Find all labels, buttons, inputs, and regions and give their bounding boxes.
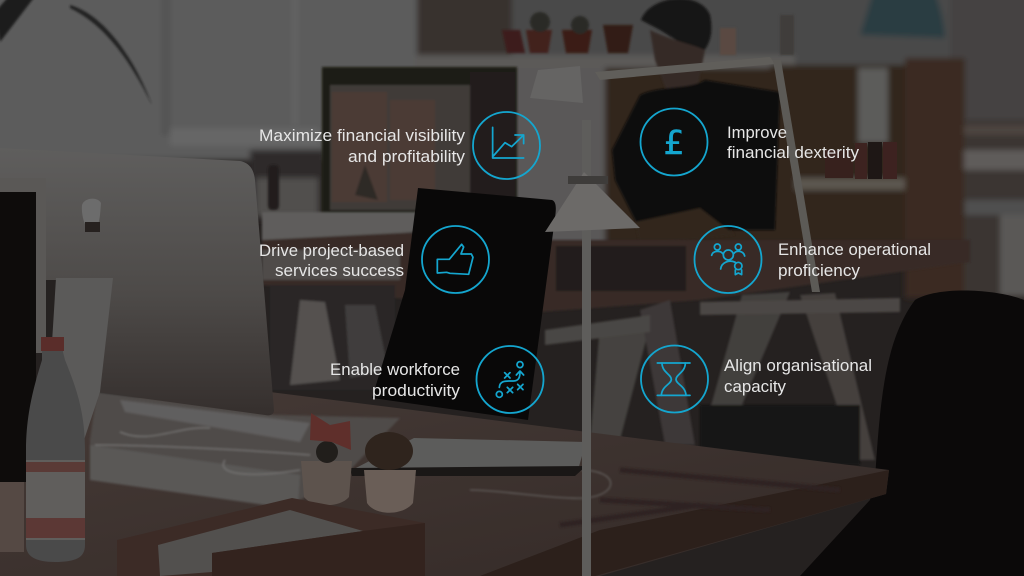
label: drive project-based services success: Drive project-based — [259, 241, 404, 260]
pencil cup — [0, 482, 24, 552]
label: maximize financial visibility — [259, 126, 466, 166]
label: drive project-based services success: services success — [275, 261, 404, 280]
bookshelf books — [825, 142, 897, 179]
label: align organisational capacity: Align organisational — [724, 356, 872, 375]
middle desk and trestles — [262, 212, 970, 465]
water bottle — [26, 337, 85, 562]
person at desk — [612, 0, 780, 245]
label: drive project-based services success — [259, 241, 404, 280]
cactus pots — [301, 432, 416, 513]
label: enable workforce productivity: productivity — [372, 381, 461, 400]
label: enhance operational proficiency — [778, 240, 931, 280]
red bow — [310, 413, 351, 450]
shelf objects — [502, 12, 794, 55]
icon: hourglass — [641, 346, 708, 412]
icon: strategy play — [476, 346, 544, 413]
label: enhance operational proficiency: Enhance operational — [778, 240, 931, 259]
label: improve financial dexterity: Improve — [727, 123, 787, 142]
item: enable workforce productivity — [330, 346, 544, 413]
label: enable workforce productivity: Enable workforce — [330, 360, 460, 379]
item: maximize financial visibility — [259, 112, 540, 179]
label: align organisational capacity — [724, 356, 872, 396]
label: enhance operational proficiency: proficiency — [778, 261, 860, 280]
item: drive project-based services — [259, 226, 489, 293]
wooden tray — [117, 498, 425, 576]
icon: pound sign — [640, 108, 708, 176]
label: enable workforce productivity — [330, 360, 461, 400]
label: maximize financial visibility: and profitability — [348, 147, 466, 166]
black office chair — [372, 188, 556, 420]
large foreground desk — [0, 392, 889, 576]
item: enhance operational proficiency — [694, 226, 931, 293]
icon: team with award — [694, 226, 762, 293]
label: improve financial dexterity: financial dexterity — [727, 143, 860, 162]
label: align organisational capacity: capacity — [724, 377, 786, 396]
light desk surface, keyboard and cable — [90, 392, 611, 505]
icon: pound sign: £ — [664, 123, 684, 162]
background plant leaf — [0, 0, 279, 210]
rear monitor — [322, 67, 517, 217]
label: maximize financial visibility: Maximize financial visibility — [259, 126, 466, 145]
icon: thumbs up — [422, 226, 489, 293]
desk lamp — [530, 57, 820, 576]
iMac back — [0, 148, 274, 440]
item: align organisational capacity — [641, 346, 872, 412]
icon: rising chart — [473, 112, 540, 179]
right beanbag shadow — [800, 291, 1024, 576]
left monitor — [0, 178, 46, 482]
label: improve financial dexterity — [727, 123, 860, 162]
laptop — [350, 438, 586, 476]
desk planks — [560, 470, 840, 525]
item: improve financial dexterity — [640, 108, 860, 176]
